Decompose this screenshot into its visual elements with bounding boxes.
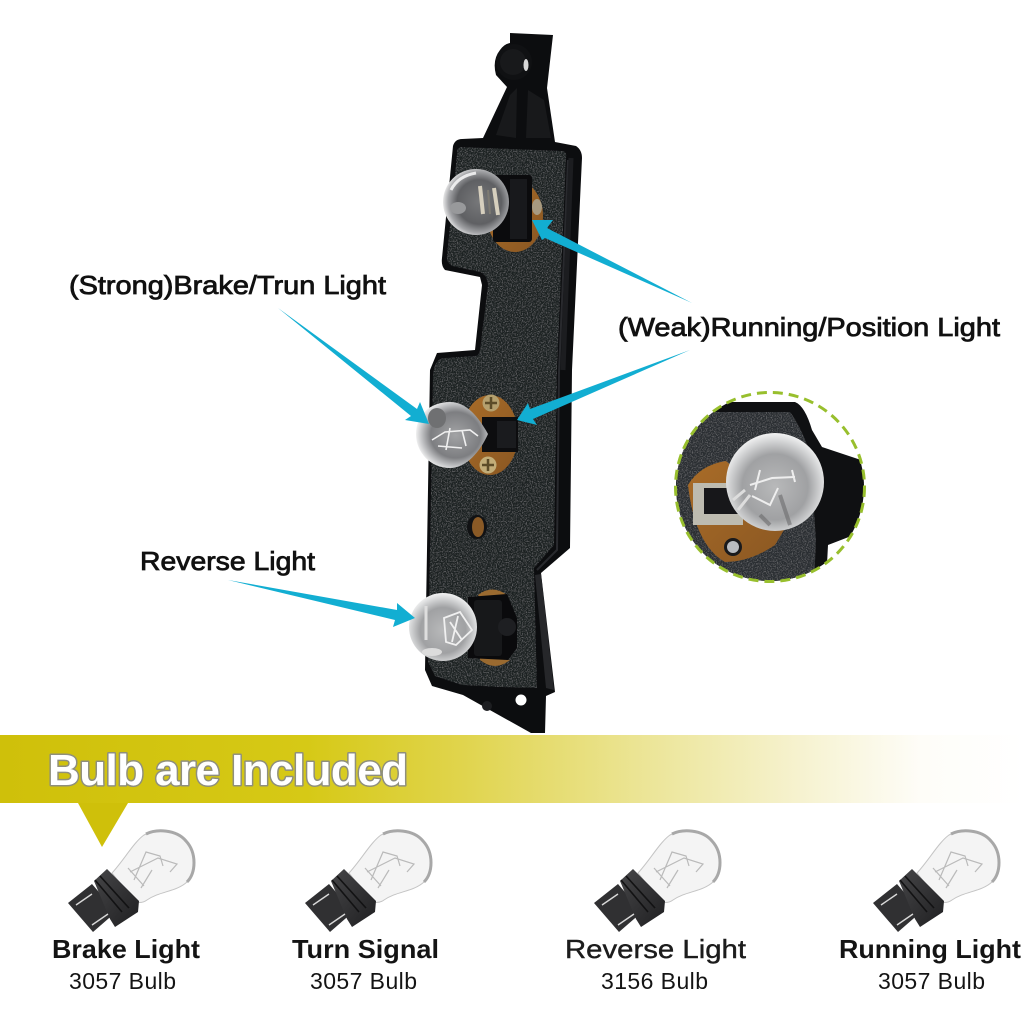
bulb item: brake light: 3057 Bulb [69,968,176,994]
hole [467,515,487,539]
bulb item: reverse light: Reverse Light [565,934,747,964]
textured plate face [428,147,566,688]
plate outer body [425,33,582,733]
bulb item: turn signal [292,831,439,994]
tab hole [516,694,526,706]
bulb item: brake light: Brake Light [52,934,200,964]
label: reverse light: Reverse Light [140,546,316,576]
bulb item: reverse light: 3156 Bulb [601,968,708,994]
bulb item: running light: 3057 Bulb [878,968,985,994]
inset: bulb close-up [675,392,867,584]
arrow: running light upper [532,220,692,303]
banner band [0,735,1024,803]
socket: top [443,169,543,252]
bulb item: turn signal: Turn Signal [292,934,439,964]
arrow: brake turn light [278,308,429,424]
side rail highlights [537,160,568,570]
label: weak running position light: (Weak)Running/Position Light [618,312,1001,342]
label: strong brake turn light: (Strong)Brake/Trun Light [69,270,387,300]
socket: middle [416,394,518,475]
mounting loop [496,44,532,80]
bulb item: turn signal: 3057 Bulb [310,968,417,994]
bulb item: running light [839,831,1021,994]
banner pointer [78,803,128,847]
bulb item: reverse light [565,831,747,994]
product: tail light circuit plate [409,33,582,733]
arrow: reverse light [228,580,415,627]
bulb item: running light: Running Light [839,934,1021,964]
banner title: Bulb are Included [48,746,408,795]
arrow: running light middle [517,350,690,425]
socket: bottom [409,590,517,666]
bulb item: brake light [52,831,200,994]
banner [0,735,1024,847]
